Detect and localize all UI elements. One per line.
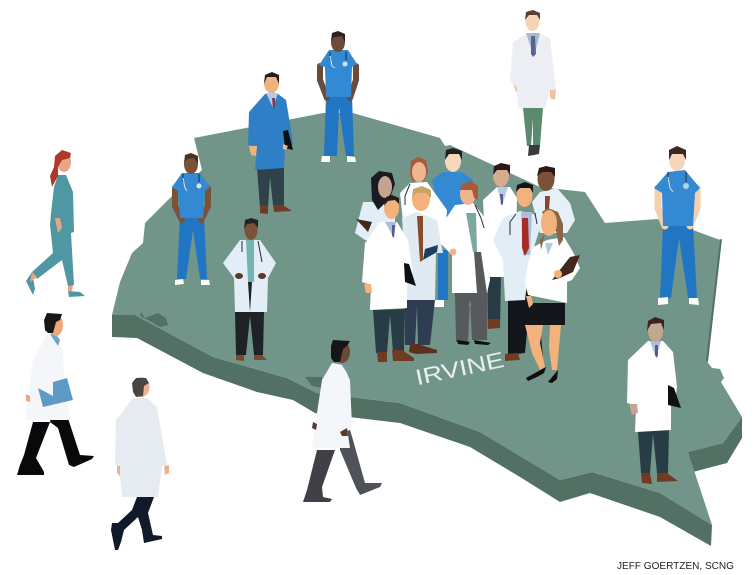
staff: woman, teal blouse and stethoscope (440, 181, 491, 345)
staff: man, blonde, brown tie (402, 186, 443, 354)
staff: man, dark skin, brown tie (532, 166, 575, 233)
staff: man, red tie (493, 182, 543, 361)
map side wall (112, 315, 712, 546)
group of ten medical staff (355, 148, 580, 383)
staff: woman, front with clipboard (525, 208, 580, 383)
doctor: walking, dark skin (303, 340, 382, 502)
doctor: walking with blue folder (17, 313, 94, 475)
staff: woman, dark hair (355, 171, 395, 240)
doctor: walking, seen from behind (111, 377, 169, 550)
doctor: white coat, stethoscope (223, 218, 276, 361)
nurse: left, blue scrubs (172, 153, 210, 285)
nurse: top, blue scrubs (319, 31, 357, 162)
staff: woman, auburn hair (400, 157, 447, 240)
doctor: blue coat with clipboard (248, 72, 293, 214)
staff: man, left with black clipboard (362, 195, 416, 362)
pond west (140, 312, 168, 327)
doctor: right, white coat with clipboard (627, 317, 681, 484)
nurse: walking, red hair (26, 150, 85, 297)
label: Irvine: IRVINE (413, 347, 506, 390)
map top surface (112, 113, 742, 525)
staff: man, tan skin (483, 163, 517, 329)
doctor: top, pale coat (510, 10, 556, 156)
map of Irvine (112, 113, 742, 546)
credit: JEFF GOERTZEN, SCNG (617, 561, 734, 572)
pond south (305, 377, 322, 388)
staff: nurse, blue scrubs (432, 148, 474, 307)
nurse: right, blue scrubs (654, 146, 700, 305)
